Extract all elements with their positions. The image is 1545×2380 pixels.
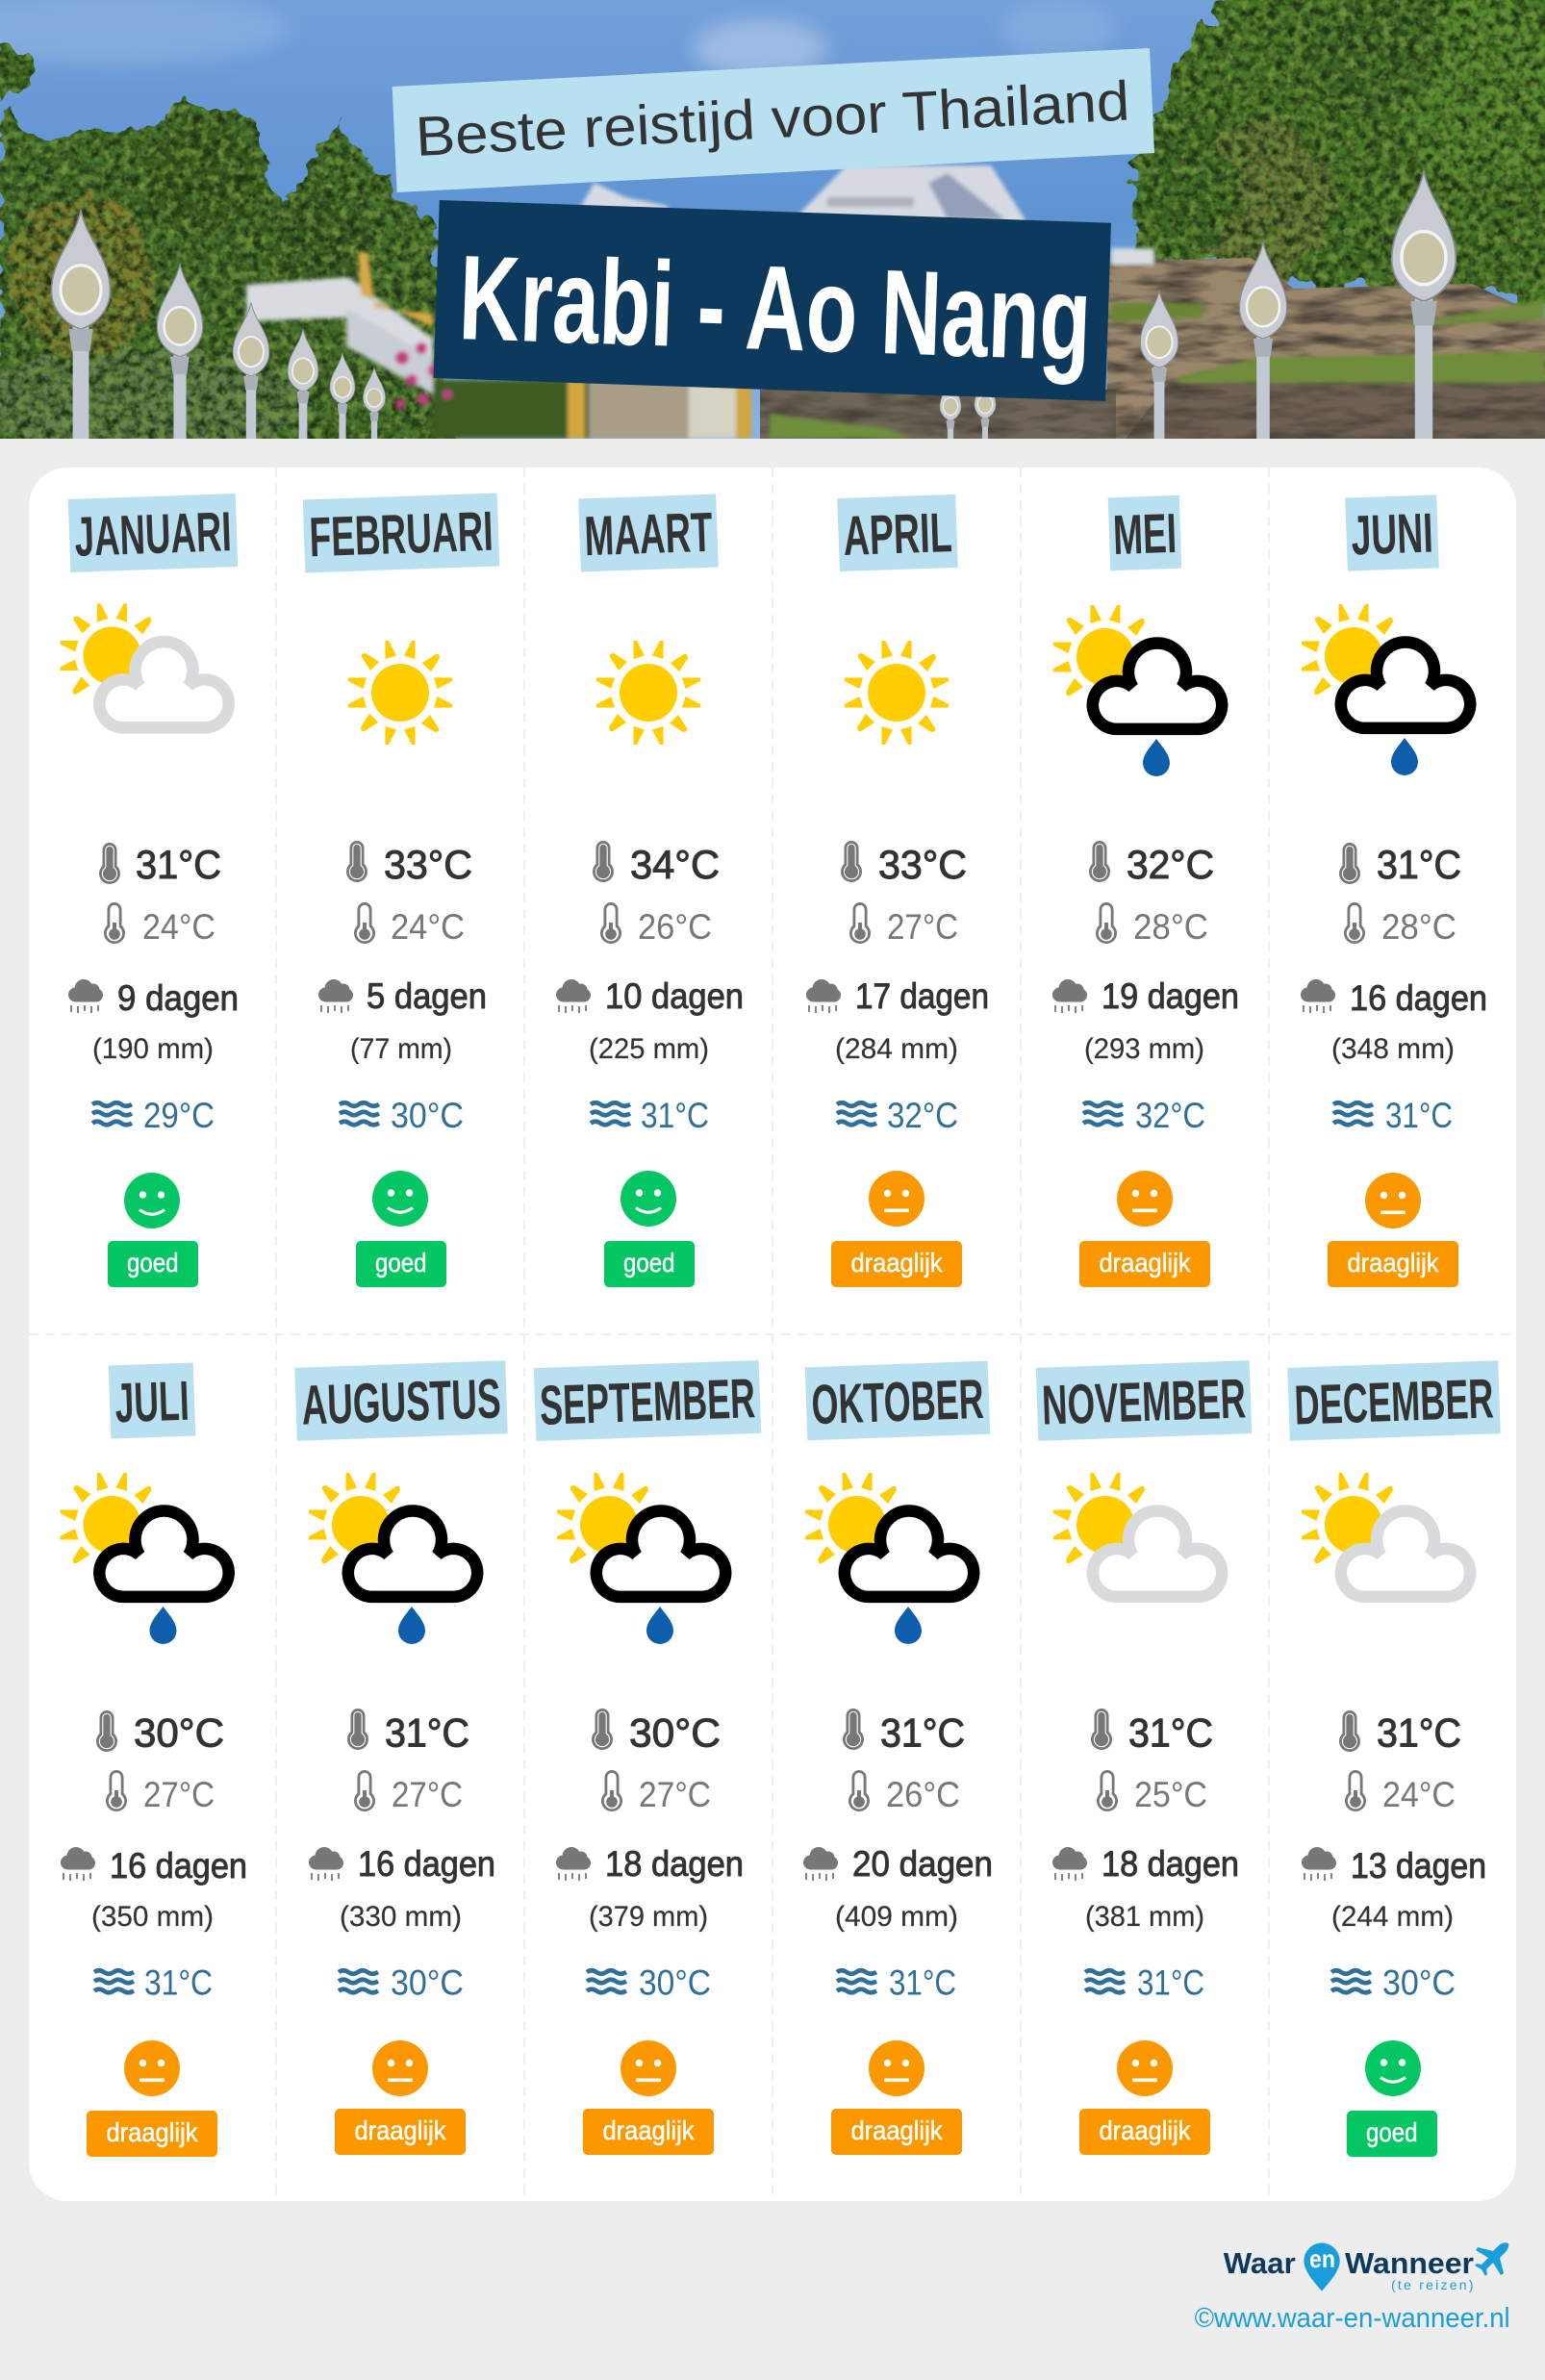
min temperature: 26°C <box>638 907 712 947</box>
icon: neutral face <box>869 1171 924 1227</box>
sea temperature: 32°C <box>1135 1096 1205 1135</box>
rating badge <box>87 2111 217 2157</box>
max temperature: 31°C <box>1377 842 1461 887</box>
rating badge: goed <box>1366 2117 1418 2147</box>
heading: juli: JULI <box>114 1370 190 1434</box>
rating badge <box>1079 2109 1210 2155</box>
icon: happy face <box>372 1171 428 1227</box>
rain days: 19 dagen <box>1102 976 1239 1016</box>
icon: rain cloud <box>1302 1847 1336 1881</box>
rating badge <box>1328 1241 1458 1287</box>
rain days: 5 dagen <box>367 976 487 1016</box>
icon: sun with rain cloud <box>557 1473 725 1644</box>
min temperature: 27°C <box>639 1775 711 1814</box>
rating badge <box>356 1241 446 1287</box>
subtitle banner: Beste reistijd voor Thailand <box>414 69 1131 168</box>
rating badge: draaglijk <box>106 2117 198 2147</box>
icon: sun with rain cloud <box>805 1473 974 1644</box>
heading: september <box>534 1360 761 1441</box>
icon: happy face <box>124 1173 180 1228</box>
rain days: 18 dagen <box>1102 1844 1239 1884</box>
logo: Waar en Wanneer: Wanneer <box>1345 2246 1474 2280</box>
heading: augustus <box>294 1360 508 1441</box>
temple roofs <box>581 165 1027 223</box>
sea temperature: 31°C <box>641 1096 709 1135</box>
icon: sun with grey cloud <box>1053 1473 1222 1597</box>
panel: november <box>1036 1360 1252 2155</box>
right trees <box>1127 0 1545 317</box>
min temperature: 27°C <box>392 1775 463 1814</box>
heading: februari <box>303 493 499 573</box>
icon: neutral face <box>372 2040 428 2096</box>
icon: max temperature <box>96 1710 117 1752</box>
heading: april <box>837 494 958 571</box>
rainfall: (284 mm) <box>835 1033 958 1065</box>
rainfall: (409 mm) <box>835 1901 958 1933</box>
left trees <box>0 43 452 457</box>
icon: rain cloud <box>61 1847 95 1881</box>
rating badge <box>583 2109 714 2155</box>
icon: waves <box>1083 1102 1123 1125</box>
logo: Waar en Wanneer: Waar <box>1224 2246 1296 2280</box>
heading: februari: FEBRUARI <box>308 500 494 569</box>
panel: monthly calendar card <box>29 468 1516 2201</box>
logo: Waar en Wanneer: en <box>1309 2244 1335 2273</box>
icon: max temperature <box>1089 841 1110 882</box>
icon: rain cloud <box>556 1847 591 1881</box>
icon: max temperature <box>1091 1709 1112 1750</box>
rainfall: (77 mm) <box>350 1033 452 1065</box>
icon: rain cloud <box>556 979 591 1013</box>
rainfall: (225 mm) <box>589 1033 709 1065</box>
panel: januari <box>60 494 239 1287</box>
icon: rain cloud <box>1301 979 1335 1013</box>
rainfall: (348 mm) <box>1331 1033 1455 1065</box>
icon: rain cloud <box>309 1847 343 1881</box>
icon: max temperature <box>346 841 367 882</box>
icon: max temperature <box>841 841 862 882</box>
icon: waves <box>837 1102 876 1125</box>
icon: waves <box>1331 1970 1371 1992</box>
heading: augustus: AUGUSTUS <box>300 1367 502 1437</box>
max temperature: 32°C <box>1127 842 1214 887</box>
icon: waves <box>339 1970 378 1992</box>
logo: Waar en Wanneer: (te reizen) <box>1391 2277 1474 2292</box>
rating badge <box>108 1241 198 1287</box>
icon: min temperature <box>1096 902 1117 944</box>
min temperature: 28°C <box>1133 907 1208 947</box>
icon: min temperature <box>104 902 125 944</box>
icon: min temperature <box>848 1770 870 1811</box>
max temperature: 34°C <box>630 842 720 887</box>
icon: max temperature <box>347 1709 368 1750</box>
panel: april <box>806 494 989 1287</box>
rating badge: draaglijk <box>1347 1248 1439 1278</box>
rain days: 16 dagen <box>358 1844 495 1884</box>
icon: min temperature <box>1344 902 1365 944</box>
sea temperature: 30°C <box>1382 1962 1456 2003</box>
panel: mei <box>1052 495 1239 1287</box>
header photo: temple stairs with lamps <box>0 0 1545 439</box>
rain days: 13 dagen <box>1351 1846 1486 1886</box>
icon: waves <box>1085 1970 1125 1992</box>
icon: waves <box>1333 1102 1373 1125</box>
sea temperature: 30°C <box>391 1962 464 2003</box>
panel: oktober <box>803 1361 993 2155</box>
min temperature: 24°C <box>1382 1775 1456 1814</box>
rocks <box>1106 258 1545 439</box>
min temperature: 24°C <box>391 907 465 947</box>
max temperature: 30°C <box>134 1710 224 1755</box>
rainfall: (379 mm) <box>589 1901 708 1933</box>
sea temperature: 31°C <box>144 1962 213 2003</box>
heading: april: APRIL <box>842 501 953 568</box>
icon: sun <box>596 641 700 745</box>
min temperature: 28°C <box>1381 907 1456 947</box>
icon: waves <box>837 1970 876 1992</box>
rating badge <box>604 1241 695 1287</box>
icon: neutral face <box>124 2040 180 2096</box>
panel: februari <box>303 493 499 1287</box>
icon: min temperature <box>849 902 871 944</box>
max temperature: 31°C <box>880 1710 965 1755</box>
heading: juni <box>1345 494 1439 571</box>
heading: september: SEPTEMBER <box>539 1367 756 1437</box>
rain days: 18 dagen <box>605 1844 744 1884</box>
icon: sun with grey cloud <box>1302 1473 1470 1597</box>
icon: waves <box>92 1102 132 1125</box>
rainfall: (381 mm) <box>1085 1901 1204 1933</box>
icon: happy face <box>621 1171 676 1227</box>
min temperature: 27°C <box>887 907 958 947</box>
icon: sun <box>845 641 949 745</box>
icon: min temperature <box>1345 1770 1366 1811</box>
rainfall: (244 mm) <box>1331 1901 1454 1933</box>
heading: oktober: OKTOBER <box>810 1368 985 1436</box>
icon: min temperature <box>1097 1770 1118 1811</box>
min temperature: 25°C <box>1134 1775 1207 1814</box>
sea temperature: 31°C <box>1137 1962 1204 2003</box>
icon: happy face <box>1365 2040 1421 2096</box>
rating badge: draaglijk <box>1099 1248 1191 1278</box>
icon: max temperature <box>593 841 614 882</box>
heading: mei <box>1108 495 1181 570</box>
icon: neutral face <box>1117 2040 1173 2096</box>
rain days: 9 dagen <box>117 978 239 1018</box>
rainfall: (350 mm) <box>91 1901 214 1933</box>
rating badge: draaglijk <box>850 1248 943 1278</box>
rain days: 16 dagen <box>1350 978 1487 1018</box>
rating badge <box>831 2109 962 2155</box>
rating badge: draaglijk <box>354 2115 446 2145</box>
icon: max temperature <box>843 1709 864 1750</box>
max temperature: 33°C <box>384 842 472 887</box>
sea temperature: 30°C <box>639 1962 711 2003</box>
heading: oktober <box>805 1361 990 1440</box>
rating badge <box>1079 1241 1210 1287</box>
heading: januari <box>68 494 238 572</box>
icon: rain cloud <box>806 979 841 1013</box>
panel: december <box>1287 1360 1501 2157</box>
heading: november <box>1036 1360 1252 1441</box>
max temperature: 31°C <box>1128 1710 1213 1755</box>
icon: sun with rain cloud <box>309 1473 477 1644</box>
icon: rain cloud <box>803 1847 838 1881</box>
footer: website credit: ©www.waar-en-wanneer.nl <box>1195 2303 1510 2334</box>
icon: location pin <box>1304 2243 1340 2291</box>
icon: sun <box>348 641 452 745</box>
panel: maart <box>556 494 744 1287</box>
icon: max temperature <box>1339 1710 1360 1752</box>
rainfall: (190 mm) <box>92 1033 214 1065</box>
icon: neutral face <box>1365 1173 1421 1228</box>
icon: rain cloud <box>1052 1847 1087 1881</box>
icon: rain cloud <box>318 979 353 1013</box>
icon: max temperature <box>1339 843 1360 884</box>
icon: min temperature <box>600 902 621 944</box>
subtitle banner <box>393 48 1154 192</box>
panel: augustus <box>294 1360 508 2155</box>
icon: max temperature <box>99 843 120 884</box>
sea temperature: 31°C <box>1385 1096 1453 1135</box>
rating badge <box>831 1241 962 1287</box>
heading: mei: MEI <box>1112 502 1178 567</box>
rating badge: draaglijk <box>1099 2115 1191 2145</box>
sea temperature: 31°C <box>889 1962 956 2003</box>
icon: rain cloud <box>1052 979 1087 1013</box>
rain days: 20 dagen <box>852 1844 993 1884</box>
min temperature: 26°C <box>886 1775 960 1814</box>
heading: juni: JUNI <box>1350 502 1434 567</box>
icon: waves <box>587 1970 626 1992</box>
icon: rain cloud <box>68 979 103 1013</box>
icon: min temperature <box>106 1770 127 1811</box>
rating badge <box>335 2109 466 2155</box>
rating badge: goed <box>375 1248 427 1278</box>
icon: waves <box>591 1102 630 1125</box>
rating badge: draaglijk <box>602 2115 695 2145</box>
rain days: 17 dagen <box>855 976 989 1016</box>
rain days: 10 dagen <box>605 976 744 1016</box>
title banner: Krabi - Ao Nang <box>457 231 1093 386</box>
rating badge: goed <box>623 1248 675 1278</box>
icon: neutral face <box>621 2040 676 2096</box>
heading: januari: JANUARI <box>73 500 233 569</box>
icon: airplane <box>1475 2242 1508 2276</box>
icon: sun with rain cloud <box>60 1473 229 1644</box>
icon: sun with rain cloud <box>1053 605 1222 776</box>
max temperature: 31°C <box>1377 1710 1461 1755</box>
max temperature: 31°C <box>136 842 221 887</box>
icon: waves <box>340 1102 379 1125</box>
icon: min temperature <box>354 902 375 944</box>
rating badge <box>1347 2111 1437 2157</box>
rating badge: goed <box>127 1248 179 1278</box>
min temperature: 24°C <box>142 907 215 947</box>
panel: juli <box>60 1362 247 2157</box>
rainfall: (330 mm) <box>340 1901 462 1933</box>
sea temperature: 29°C <box>143 1096 215 1135</box>
rating badge: draaglijk <box>850 2115 943 2145</box>
icon: waves <box>94 1970 134 1992</box>
panel: juni <box>1301 494 1487 1287</box>
heading: maart: MAART <box>583 501 714 568</box>
sea temperature: 30°C <box>391 1096 464 1135</box>
icon: sun with grey cloud <box>60 604 229 727</box>
logo: Waar en Wanneer <box>1224 2242 1508 2292</box>
icon: min temperature <box>601 1770 622 1811</box>
icon: sun with rain cloud <box>1302 604 1470 775</box>
rain days: 16 dagen <box>110 1846 247 1886</box>
max temperature: 33°C <box>878 842 967 887</box>
sea temperature: 32°C <box>887 1096 958 1135</box>
icon: neutral face <box>869 2040 924 2096</box>
heading: november: NOVEMBER <box>1041 1367 1247 1437</box>
heading: juli <box>109 1362 195 1439</box>
min temperature: 27°C <box>143 1775 215 1814</box>
max temperature: 31°C <box>385 1710 469 1755</box>
rainfall: (293 mm) <box>1084 1033 1204 1065</box>
heading: maart <box>578 494 719 571</box>
panel: september <box>534 1360 761 2155</box>
max temperature: 30°C <box>629 1710 721 1755</box>
icon: max temperature <box>592 1709 613 1750</box>
title banner <box>434 200 1111 401</box>
icon: neutral face <box>1117 1171 1173 1227</box>
icon: min temperature <box>354 1770 375 1811</box>
